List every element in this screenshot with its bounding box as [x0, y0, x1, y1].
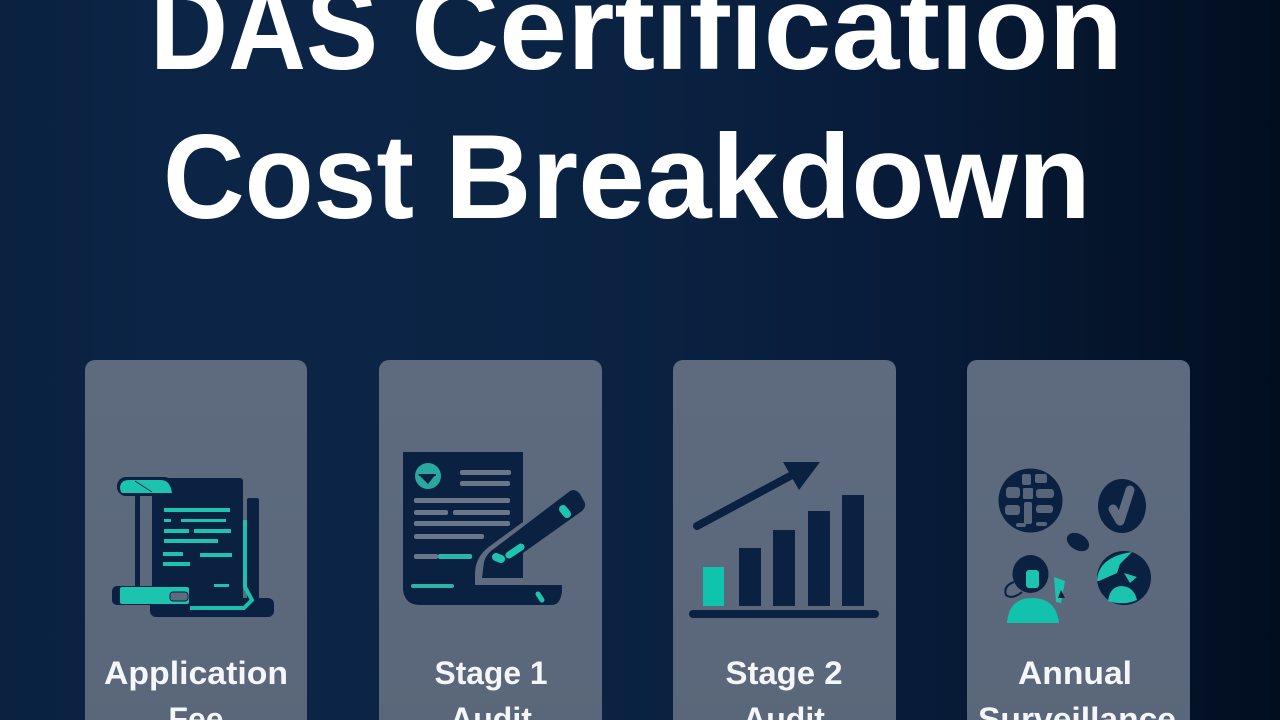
title: Breakdown — [445, 110, 1091, 244]
title — [150, 0, 1123, 244]
icon: surveillance globe, check and auditor — [998, 468, 1151, 623]
label: stage 2 audit: Stage 2 — [726, 655, 842, 691]
icon: document and pen — [403, 452, 585, 605]
label: annual surveillance: Annual — [1018, 655, 1132, 691]
title: Cost — [163, 110, 414, 244]
icon: rising bar chart — [689, 462, 879, 618]
panel: annual surveillance — [967, 360, 1190, 720]
icon: document scroll — [112, 477, 274, 617]
panel: stage 1 audit — [379, 360, 602, 720]
label: stage 1 audit: Stage 1 — [434, 655, 548, 691]
panel: application fee — [85, 360, 307, 720]
panel: stage 2 audit — [673, 360, 896, 720]
label: application fee: Application — [104, 655, 288, 691]
